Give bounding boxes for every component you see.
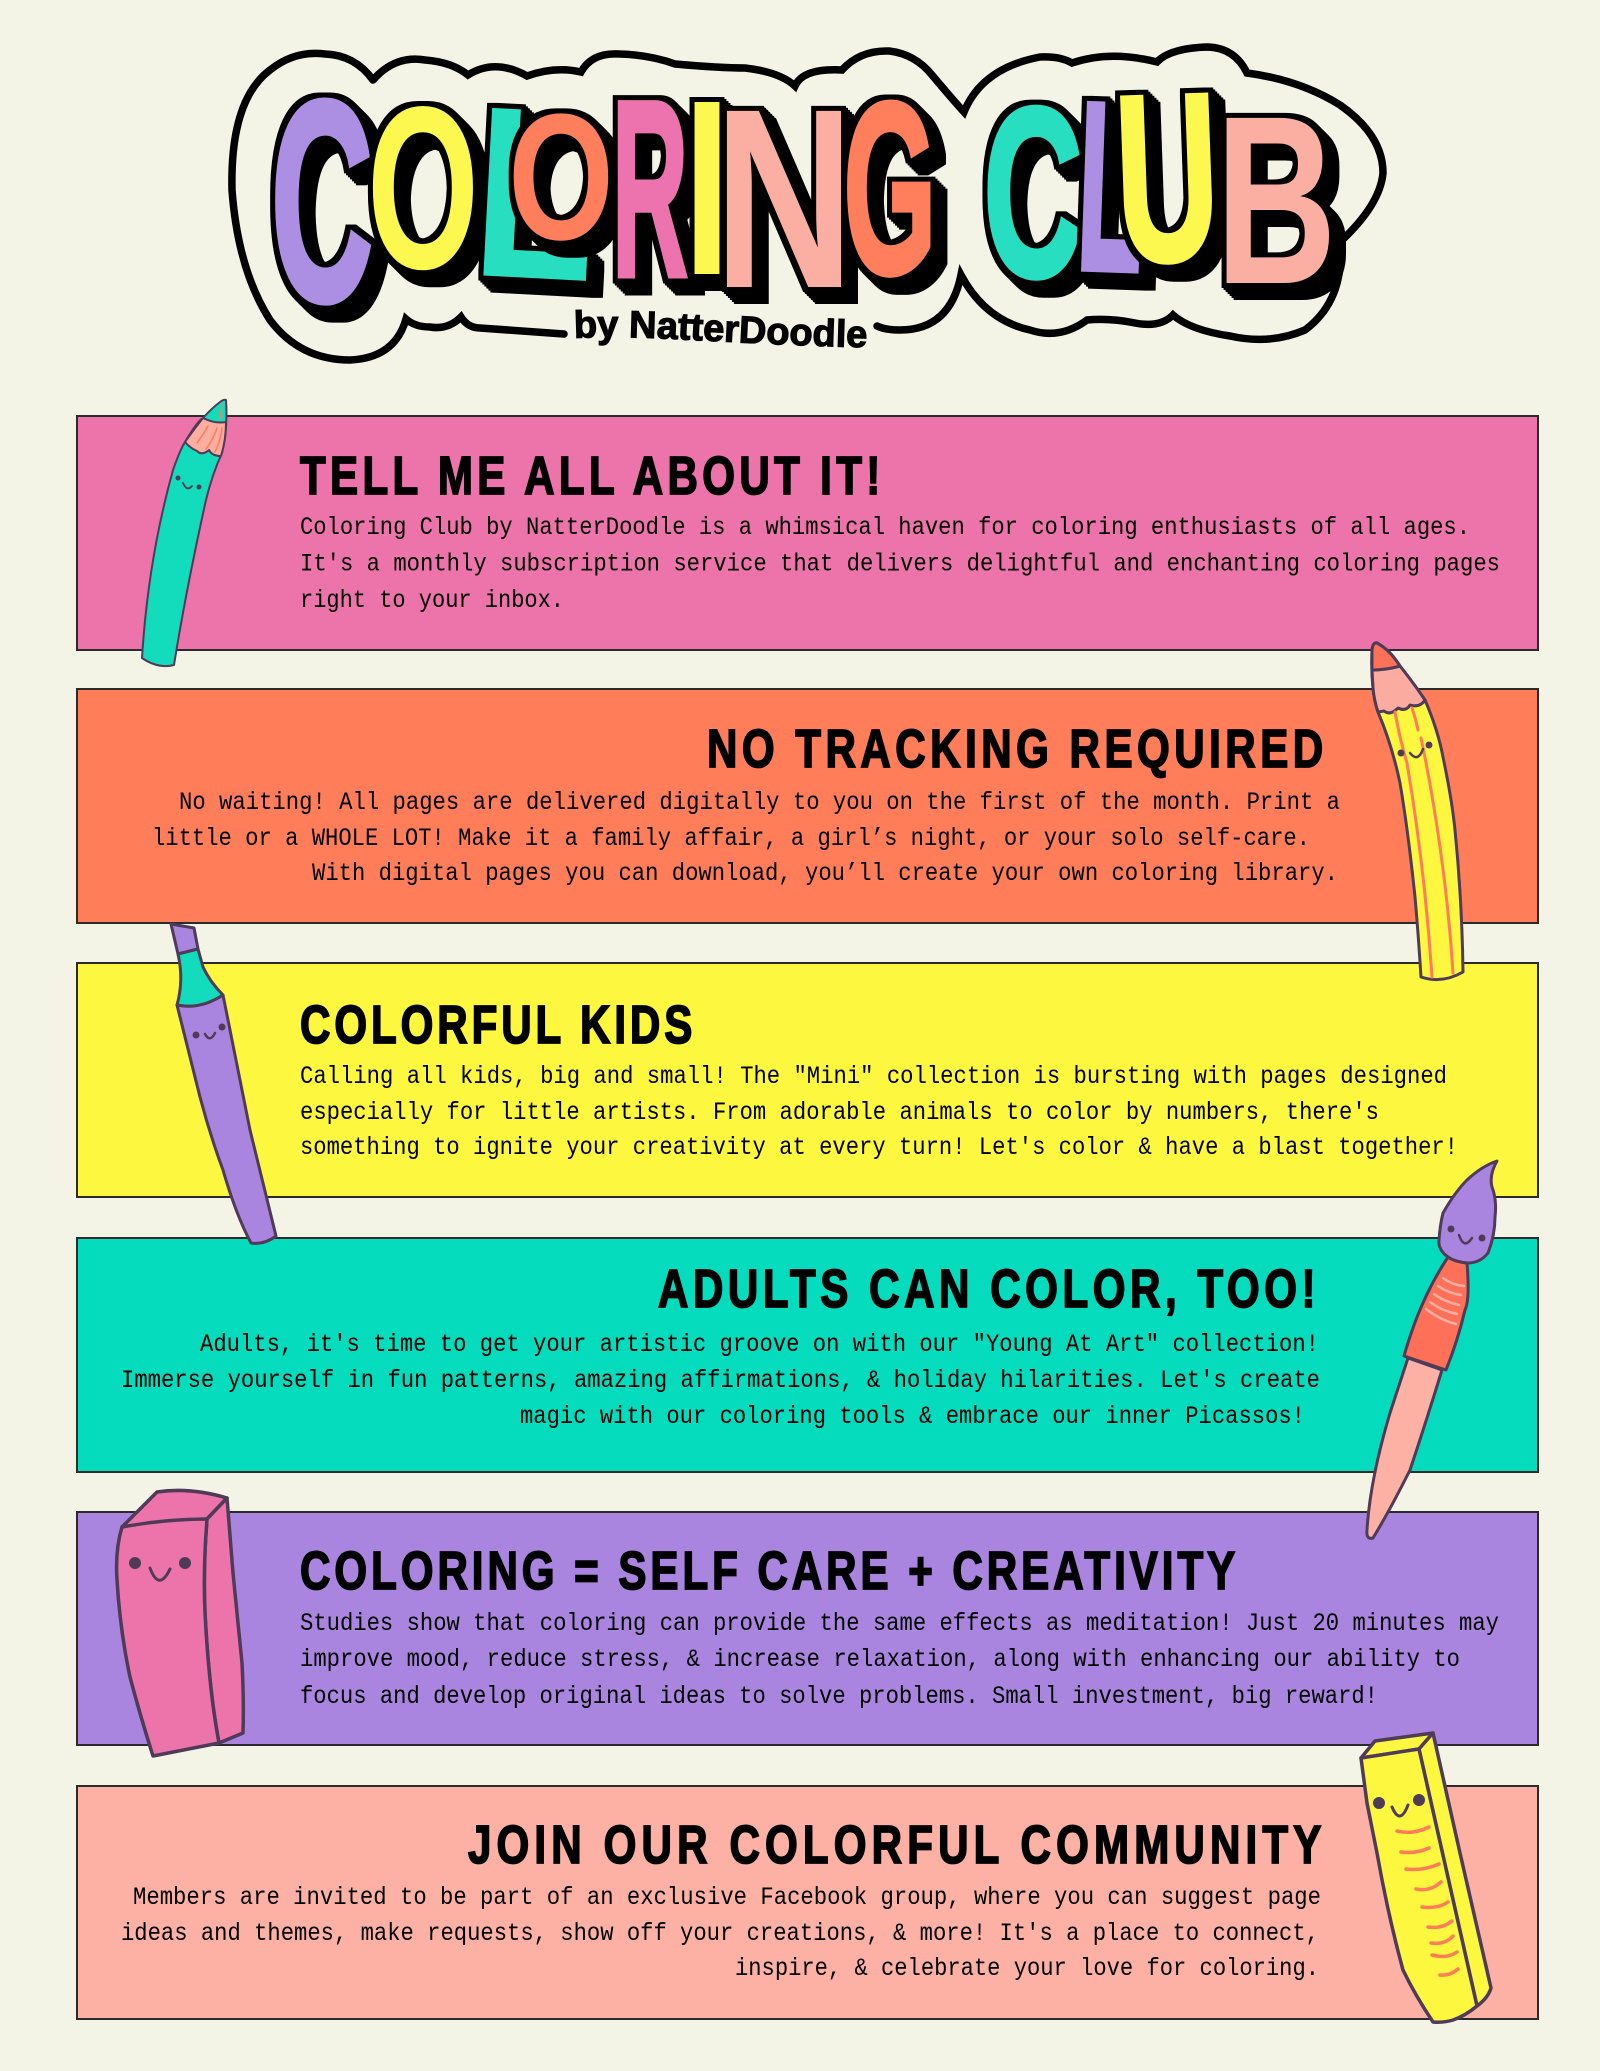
heading: COLORFUL KIDS: [300, 995, 692, 1055]
logo lettering: COLORING CLUB: L: [1074, 54, 1148, 322]
body text: No waiting! All pages are delivered digitally to you on the first of the month. Print a: [179, 788, 1340, 817]
icon: yellow crayon stick: [1361, 1733, 1491, 2022]
heading: COLORING = SELF CARE + CREATIVITY: [300, 1541, 1235, 1601]
body text: especially for little artists. From adorable animals to color by numbers, there's: [300, 1098, 1379, 1127]
body text: [152, 788, 1340, 888]
body text: magic with our coloring tools & embrace our inner Picassos!: [520, 1402, 1305, 1431]
logo lettering: COLORING CLUB: O: [508, 77, 614, 277]
heading: ADULTS CAN COLOR, TOO!: [658, 1259, 1316, 1319]
icon: paintbrush: [1367, 1161, 1497, 1538]
body text: Members are invited to be part of an exclusive Facebook group, where you can suggest page: [133, 1883, 1321, 1912]
logo cloud outline: [232, 47, 1383, 360]
byline: by NatterDoodle: by NatterDoodle: [575, 310, 867, 348]
icon: yellow pencil: [1372, 643, 1463, 980]
body text: little or a WHOLE LOT! Make it a family affair, a girl’s night, or your solo self-care.: [152, 824, 1310, 853]
body text: [300, 513, 1500, 615]
panel: adults can color too: [77, 1238, 1538, 1472]
body text: Coloring Club by NatterDoodle is a whimsical haven for coloring enthusiasts of all ages.: [300, 513, 1470, 542]
body text: Immerse yourself in fun patterns, amazing affirmations, & holiday hilarities. Let's create: [121, 1366, 1320, 1395]
logo lettering: COLORING CLUB: O: [367, 58, 479, 317]
icon: pink block eraser: [117, 1490, 243, 1756]
logo lettering: COLORING CLUB: G: [843, 51, 937, 325]
logo: [228, 42, 1387, 364]
logo lettering: COLORING CLUB: [271, 42, 1337, 361]
icon: teal colored pencil: [142, 400, 226, 666]
logo lettering: COLORING CLUB: N: [714, 56, 854, 342]
logo lettering: COLORING CLUB: C: [983, 57, 1083, 328]
body text: right to your inbox.: [300, 586, 564, 615]
panel: self care and creativity: [77, 1512, 1538, 1745]
body text: [300, 1062, 1458, 1162]
body text: Calling all kids, big and small! The "Mini" collection is bursting with pages designed: [300, 1062, 1447, 1091]
logo lettering: COLORING CLUB: I: [683, 47, 731, 327]
logo lettering: COLORING CLUB: C: [271, 42, 373, 361]
panel: no tracking required: [77, 689, 1538, 923]
body text: improve mood, reduce stress, & increase relaxation, along with enhancing our ability to: [300, 1645, 1460, 1674]
body text: [300, 1609, 1499, 1711]
logo lettering: COLORING CLUB: L: [467, 55, 604, 334]
logo lettering: COLORING CLUB: R: [612, 48, 688, 329]
heading: TELL ME ALL ABOUT IT!: [300, 446, 880, 506]
body text: inspire, & celebrate your love for coloring.: [735, 1954, 1319, 1983]
panel: tell me all about it: [77, 416, 1538, 650]
body text: With digital pages you can download, you’ll create your own coloring library.: [312, 859, 1338, 888]
body text: Adults, it's time to get your artistic groove on with our "Young At Art" collection!: [200, 1330, 1319, 1359]
body text: [121, 1883, 1321, 1983]
heading: NO TRACKING REQUIRED: [707, 719, 1323, 779]
logo lettering: COLORING CLUB: B: [1215, 65, 1337, 334]
body text: something to ignite your creativity at every turn! Let's color & have a blast together!: [300, 1133, 1458, 1162]
heading: JOIN OUR COLORFUL COMMUNITY: [468, 1815, 1321, 1875]
logo lettering: COLORING CLUB: U: [1111, 43, 1223, 313]
icon: purple marker: [171, 924, 276, 1243]
body text: focus and develop original ideas to solve problems. Small investment, big reward!: [300, 1682, 1378, 1711]
panel: colorful kids: [77, 963, 1538, 1197]
body text: [121, 1330, 1320, 1431]
panel: join our colorful community: [77, 1786, 1538, 2019]
body text: ideas and themes, make requests, show off your creations, & more! It's a place to connect,: [121, 1919, 1319, 1948]
